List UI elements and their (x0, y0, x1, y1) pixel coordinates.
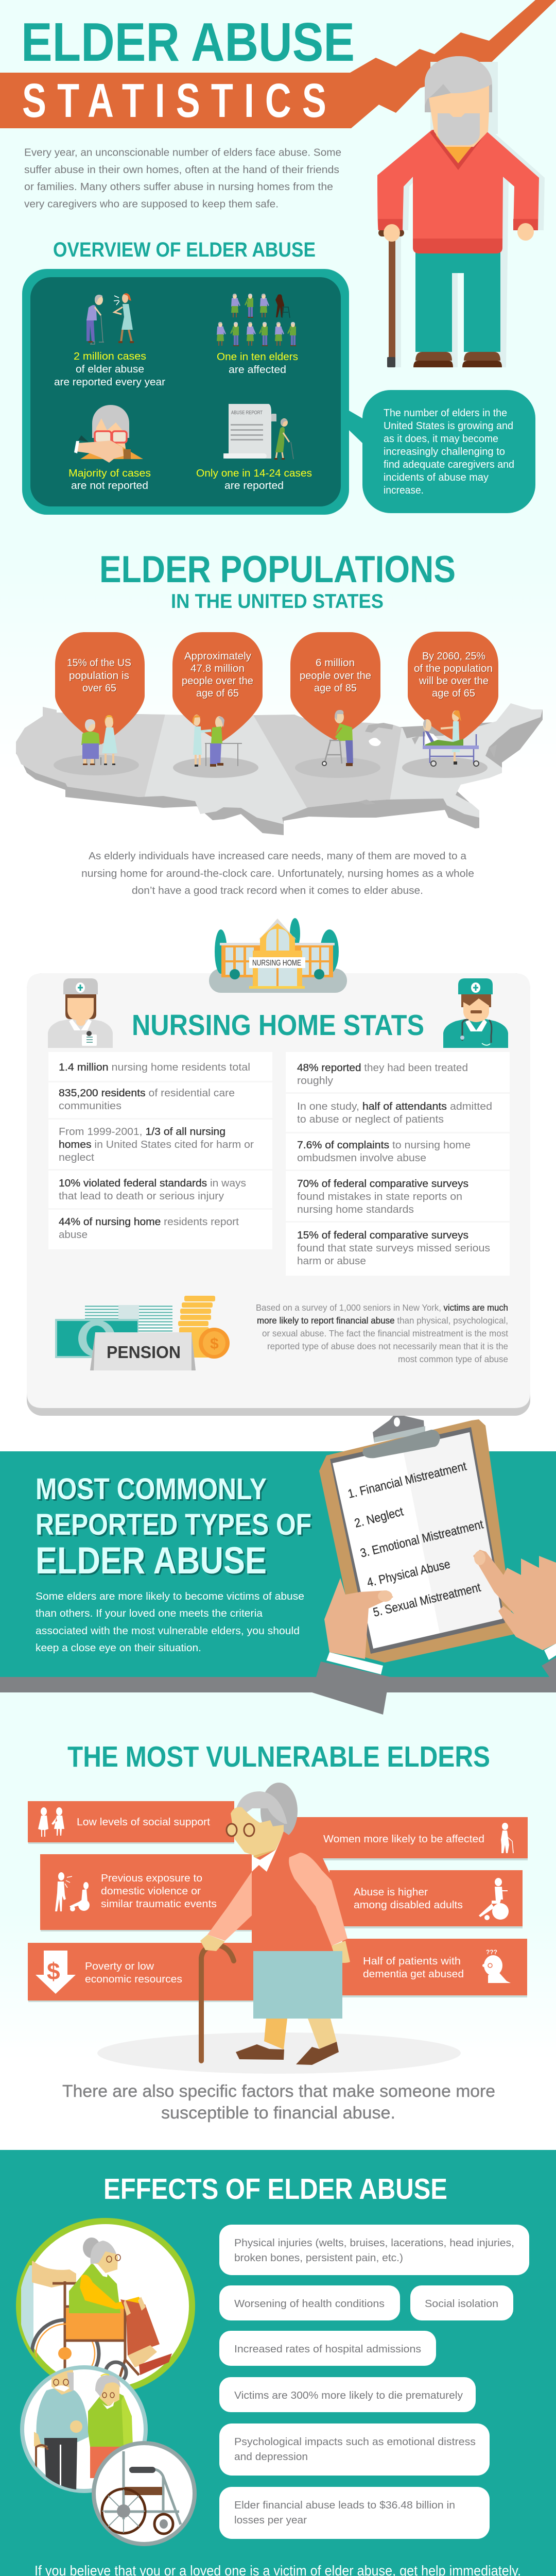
figures: patient on bed with nurse (402, 710, 488, 778)
stat cards: right column: 15% of federal comparative surveys (297, 1230, 468, 1241)
panel: previous exposure: similar traumatic events (101, 1898, 217, 1910)
effect cards: and depression (234, 2451, 308, 2463)
pin 1: 15 percent of US population: population is (69, 670, 129, 682)
figures: nurse and elder with walker (173, 715, 258, 778)
effect cards: Physical injuries (welts, bruises, lacerations, head injuries, (234, 2237, 514, 2249)
body text: care needs (81, 850, 474, 896)
pin 2: 47.8 million: people over the (182, 675, 253, 687)
pin 3: 6 million (290, 632, 380, 740)
stat: only one: are reported (224, 480, 284, 492)
effect cards: Elder financial abuse leads to $36.48 billion in (234, 2499, 455, 2511)
pin 1: 15 percent of US population: 15% of the US (67, 657, 131, 669)
pin 4: by 2060 (408, 632, 498, 743)
text: some elders: keep a close eye on their situation. (36, 1642, 201, 1654)
icon: clipboard with list: 4. Physical Abuse (366, 1557, 451, 1590)
stat: majority (68, 467, 151, 492)
icon: clipboard with list: 2. Neglect (353, 1504, 405, 1531)
callout: growing elder population: The number of elders in the (384, 407, 507, 419)
intro text: or families. Many others suffer abuse in nursing homes from the (24, 181, 333, 193)
icon: wheelchair user (479, 1878, 509, 1920)
icon: couple (38, 1807, 64, 1837)
figure: elder with walker (295, 710, 380, 778)
heading: most vulnerable elders: THE MOST VULNERABLE ELDERS (67, 1740, 490, 1773)
pin 4: by 2060: of the population (414, 663, 493, 674)
body text: care needs: As elderly individuals have increased care needs, many of them are moved to a (89, 850, 467, 862)
pin 2: 47.8 million: age of 65 (196, 687, 239, 699)
text: some elders: than others. If your loved one meets the criteria (36, 1607, 263, 1619)
icon: pension money: PENSION (107, 1343, 181, 1362)
effect cards: Victims are 300% more likely to die prematurely (234, 2389, 463, 2401)
callout: growing elder population: United States is growing and (384, 420, 513, 432)
panel: women more likely (284, 1817, 528, 1860)
panel: effects of elder abuse (0, 2150, 556, 2576)
effect cards: broken bones, persistent pain, etc.) (234, 2252, 403, 2264)
stat cards: left column: From 1999-2001, 1/3 of all nursing (59, 1126, 225, 1138)
icon: clipboard with list: 1. Financial Mistreatment (346, 1459, 468, 1501)
effect cards: Worsening of health conditions (234, 2298, 385, 2310)
body text: care needs: don’t have a good track record when it comes to elder abuse. (132, 885, 423, 896)
icon: one in ten elders (217, 294, 296, 346)
stat: 2 million cases (54, 350, 165, 388)
intro text: suffer abuse in their own homes, often at the hand of their friends (24, 164, 339, 176)
stat: one in ten: are affected (229, 364, 286, 376)
heading: elder populations: ELDER POPULATIONS (99, 549, 456, 590)
pin 1: 15 percent of US population: over 65 (82, 682, 116, 694)
effect cards: losses per year (234, 2514, 307, 2526)
icon: nurse left (48, 978, 113, 1048)
icon: clipboard with list (319, 1416, 514, 1663)
callout: growing elder population: as it does, it may become (384, 433, 498, 445)
icon: clipboard with list: 3. Emotional Mistreatment (359, 1517, 485, 1561)
panel: nursing home stats (27, 918, 530, 1416)
panel: previous exposure (40, 1854, 252, 1931)
icon: clipboard with list: 5. Sexual Mistreatment (372, 1581, 482, 1620)
circle: woman in wheelchair (19, 2221, 192, 2391)
icon: woman shouting at elder (86, 293, 134, 344)
effect cards: Increased rates of hospital admissions (234, 2343, 421, 2355)
icon: dollar down arrow (36, 1951, 76, 1994)
text: financial abuse survey: or sexual abuse. The fact the financial mistreatment is the most (262, 1328, 508, 1338)
circle: elderly couple (22, 2367, 146, 2494)
panel: previous exposure: domestic violence or (101, 1885, 201, 1897)
heading: most commonly reported (36, 1472, 311, 1582)
panel: disabled adults (329, 1870, 523, 1928)
callout: growing elder population: find adequate caregivers and (384, 459, 514, 470)
body text: care needs: nursing home for around-the-clock care. Unfortunately, nursing homes as a whole (81, 868, 474, 879)
stat cards: left column: 10% violated federal standards in ways (59, 1178, 246, 1189)
ground shadow (97, 2032, 461, 2074)
map: united states (16, 703, 543, 835)
effect cards (219, 2225, 529, 2539)
icon: dollar down arrow: $ (47, 1958, 60, 1985)
title (21, 12, 355, 127)
stat cards: right column: 7.6% of complaints to nursing home (297, 1140, 471, 1151)
stat cards: left column: homes in United States cited for harm or (59, 1139, 254, 1150)
orange banner arrow (0, 0, 556, 128)
callout: growing elder population (362, 390, 535, 513)
panel: poverty: economic resources (85, 1973, 182, 1985)
heading: most commonly reported: REPORTED TYPES OF (36, 1508, 311, 1541)
heading: overview of elder abuse: OVERVIEW OF ELDER ABUSE (53, 239, 316, 261)
heading: most commonly reported: MOST COMMONLY (36, 1472, 267, 1506)
intro text: very caregivers who are supposed to keep them safe. (24, 198, 279, 210)
stat: only one: Only one in 14-24 cases (196, 467, 312, 479)
pin 1: 15 percent of US population (55, 632, 145, 744)
panel: low levels of social support (28, 1801, 234, 1844)
heading: elder populations: IN THE UNITED STATES (171, 590, 384, 613)
panel: disabled adults: among disabled adults (354, 1899, 463, 1911)
callout: growing elder population: increase. (384, 484, 424, 496)
pin 3: 6 million: 6 million (316, 657, 355, 669)
stat: 2 million cases: are reported every year (54, 376, 165, 388)
title: ELDER ABUSE (21, 12, 355, 73)
text: financial abuse factors (62, 2081, 495, 2122)
stat: only one (196, 467, 312, 492)
circle: wheelchair (94, 2443, 195, 2544)
icon: abuse report scroll: ABUSE REPORT (231, 410, 263, 416)
text: some elders: Some elders are more likely to become victims of abuse (36, 1590, 304, 1602)
text: financial abuse factors: susceptible to financial abuse. (161, 2103, 395, 2122)
callout: growing elder population: incidents of abuse may (384, 471, 489, 483)
stat: majority: Majority of cases (68, 467, 151, 479)
pin 3: 6 million: age of 85 (314, 682, 357, 694)
stat cards: right column: 48% reported they had been treated (297, 1062, 468, 1074)
stat cards: left column: neglect (59, 1152, 94, 1163)
stat: 2 million cases: 2 million cases (74, 350, 146, 362)
stat cards: left column: 835,200 residents of residential care (59, 1088, 235, 1099)
effect cards: Psychological impacts such as emotional distress (234, 2436, 476, 2448)
icon: nurse right (443, 978, 508, 1048)
panel: dementia: dementia get abused (363, 1968, 464, 1980)
figures: elder with nurse (54, 715, 139, 775)
icon: hand covering elder mouth (74, 405, 143, 463)
stat cards: right column: harm or abuse (297, 1256, 366, 1267)
building: nursing home (209, 918, 347, 993)
icon: pension money: $ (210, 1335, 219, 1352)
panel: overview (22, 269, 362, 515)
building: nursing home: NURSING HOME (252, 959, 301, 968)
text: financial abuse survey: Based on a survey of 1,000 seniors in New York, victims are much (256, 1302, 508, 1313)
effect cards: Social isolation (425, 2298, 498, 2310)
pin 2: 47.8 million: Approximately (184, 650, 252, 662)
stat cards: right column: 70% of federal comparative surveys (297, 1178, 468, 1190)
stat cards: right column: ombudsmen involve abuse (297, 1153, 426, 1164)
title: STATISTICS (22, 74, 337, 127)
stat cards: left column: 44% of nursing home residents report (59, 1216, 239, 1228)
stat cards: left column: that lead to death or serious injury (59, 1191, 224, 1202)
text: financial abuse factors: There are also specific factors that make someone more (62, 2081, 495, 2100)
text: some elders: associated with the most vulnerable elders, you should (36, 1625, 300, 1637)
stat cards: left column (48, 1052, 272, 1249)
stat: majority: are not reported (71, 480, 148, 492)
pin 4: by 2060: By 2060, 25% (422, 650, 485, 662)
heading: elder populations (99, 549, 456, 613)
icon: abuse report scroll (223, 404, 293, 460)
stat cards: right column: found mistakes in state reports on (297, 1191, 462, 1202)
panel: poverty (28, 1943, 253, 2002)
stat cards: right column: In one study, half of attendants admitted (297, 1101, 492, 1112)
illustration: elderly man with cane (377, 56, 545, 367)
icon: shouting at wheelchair user (55, 1872, 90, 1911)
stat cards: right column: found that state surveys missed serious (297, 1243, 490, 1254)
heading: effects: EFFECTS OF ELDER ABUSE (103, 2173, 447, 2206)
panel: poverty: Poverty or low (85, 1960, 154, 1972)
stat cards: right column (286, 1052, 510, 1276)
text: some elders (36, 1590, 304, 1654)
stat cards: left column: abuse (59, 1229, 88, 1241)
icon: hands holding clipboard (312, 1550, 556, 1715)
stat cards: right column: nursing home standards (297, 1204, 414, 1215)
panel: women more likely: Women more likely to be affected (323, 1833, 484, 1845)
pin 3: 6 million: people over the (300, 670, 371, 682)
stat: one in ten (217, 351, 298, 376)
icon: confused elder: ??? (486, 1948, 497, 1956)
pin 4: by 2060: will be over the (419, 675, 489, 687)
text: financial abuse survey: more likely to report financial abuse than physical, psychological, (257, 1315, 508, 1326)
text: financial abuse survey: most common type of abuse (398, 1354, 508, 1364)
stat: one in ten: One in ten elders (217, 351, 298, 363)
heading: most commonly reported: ELDER ABUSE (36, 1540, 267, 1582)
panel: dementia (342, 1939, 527, 1997)
panel: low levels of social support: Low levels of social support (77, 1816, 210, 1828)
panel: disabled adults: Abuse is higher (354, 1886, 428, 1898)
intro text (24, 146, 341, 210)
stat cards: right column: roughly (297, 1075, 333, 1087)
pin 2: 47.8 million: 47.8 million (190, 663, 245, 674)
text: financial abuse survey (256, 1302, 508, 1364)
icon: confused elder (482, 1948, 511, 1983)
stat cards: right column: to abuse or neglect of patients (297, 1114, 444, 1125)
stat cards: left column: communities (59, 1100, 121, 1112)
panel: previous exposure: Previous exposure to (101, 1872, 202, 1884)
pin 2: 47.8 million (172, 632, 263, 742)
text: financial abuse survey: reported type of abuse does not necessarily mean that it is the (267, 1341, 508, 1351)
icon: woman with cane (501, 1823, 513, 1853)
panel: dementia: Half of patients with (363, 1955, 461, 1967)
pin 4: by 2060: age of 65 (432, 687, 475, 699)
intro text: Every year, an unconscionable number of elders face abuse. Some (24, 146, 341, 159)
callout: growing elder population: increasingly challenging to (384, 446, 505, 457)
heading: nursing home stats: NURSING HOME STATS (132, 1009, 424, 1042)
icon: pension money (55, 1296, 230, 1370)
stat: 2 million cases: of elder abuse (76, 363, 144, 375)
stat cards: left column: 1.4 million nursing home residents total (59, 1062, 250, 1073)
panel: most commonly reported types (0, 1416, 556, 1715)
illustration: elderly woman with cane (200, 1783, 350, 2065)
